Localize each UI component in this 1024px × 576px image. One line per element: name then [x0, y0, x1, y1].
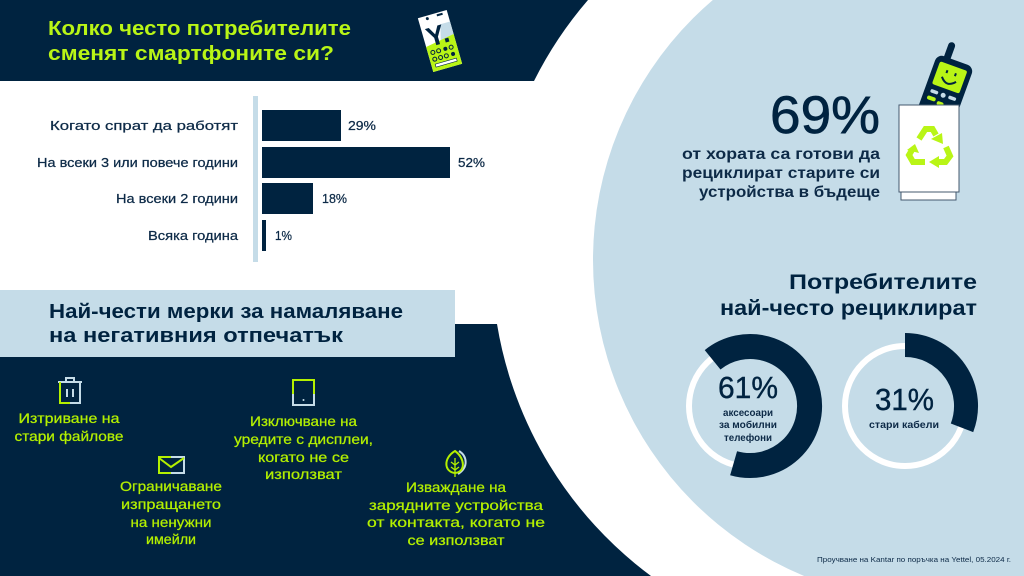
icon: envelope [159, 457, 184, 473]
bar: 52% [37, 147, 485, 178]
title: сменят смартфоните си? [48, 43, 334, 65]
text: delete old files: стари файлове [14, 428, 124, 444]
panel: measures heading band [0, 290, 455, 357]
donut chart: 31% [845, 345, 966, 466]
icon: trash can [58, 378, 82, 403]
stat: 69%: рециклират старите си [682, 165, 880, 182]
donut chart: 61%: 61% [718, 370, 778, 405]
bar: 29% [50, 110, 376, 141]
title [48, 18, 351, 65]
donut chart: 61%: аксесоари [723, 408, 773, 419]
text: switch off display devices: Изключване на [250, 413, 357, 429]
panel: bottom navy area [0, 324, 651, 576]
stat: 69%: от хората са готови да [682, 146, 880, 163]
text: delete old files: Изтриване на [18, 410, 120, 426]
bar: 1%: 1% [275, 228, 292, 243]
text: delete old files [14, 410, 124, 444]
text: unplug chargers: се използват [408, 532, 505, 548]
text: unplug chargers [367, 479, 545, 548]
panel: top header band [0, 0, 588, 81]
bar: 52%: 52% [458, 155, 485, 170]
icon: smartphone with Y logo [418, 10, 462, 72]
title: Колко често потребителите [48, 18, 351, 40]
icon: leaf [446, 451, 466, 477]
bar: 18%: На всеки 2 години [116, 191, 238, 206]
donut chart: 31%: 31% [875, 382, 934, 417]
heading: measures [49, 301, 403, 347]
bar: 18% [116, 183, 347, 214]
donut chart: 61%: телефони [724, 432, 772, 444]
text: switch off display devices: уредите с дисплеи, [234, 431, 373, 447]
text: limit emails [120, 478, 222, 547]
heading: consumers recycle: най-често рециклират [720, 297, 977, 320]
text: limit emails: имейли [146, 531, 196, 547]
heading: measures: на негативния отпечатък [49, 325, 344, 347]
icon: recycle symbol [907, 129, 950, 168]
text: unplug chargers: от контакта, когато не [367, 514, 545, 530]
text: limit emails: на ненужни [130, 514, 212, 530]
stat: 69%: 69% [770, 86, 880, 145]
text: switch off display devices: използват [265, 466, 343, 482]
text: limit emails: изпращането [121, 496, 221, 512]
heading: consumers recycle [720, 271, 977, 320]
bar: 52%: На всеки 3 или повече години [37, 155, 238, 170]
bar chart [37, 96, 485, 262]
text: switch off display devices [234, 413, 373, 482]
icon: smartphone with Y logo: Y. [423, 18, 453, 53]
donut chart: 61% [689, 345, 811, 467]
heading: consumers recycle: Потребителите [789, 271, 977, 294]
heading: measures: Най-чести мерки за намаляване [49, 301, 403, 323]
text: unplug chargers: зарядните устройства [369, 497, 543, 513]
bar: 18%: 18% [322, 191, 347, 206]
icon: old phone [913, 39, 980, 135]
stat: 69% [682, 86, 880, 201]
text: switch off display devices: когато не се [258, 449, 349, 465]
bar: 29%: 29% [348, 118, 376, 133]
panel: light blue circle [593, 0, 1024, 576]
text: limit emails: Ограничаване [120, 478, 222, 494]
donut chart: 61%: за мобилни [719, 419, 777, 431]
icon: tablet [293, 380, 314, 405]
text: unplug chargers: Изваждане на [406, 479, 506, 495]
stat: 69%: устройства в бъдеще [699, 184, 880, 201]
icon: recycling bin [899, 105, 959, 200]
donut chart: 31%: стари кабели [869, 419, 939, 431]
source note: Проучване на Kantar по поръчка на Yettel, 05.2024 г. [817, 555, 1011, 564]
bar: 29%: Когато спрат да работят [50, 118, 238, 133]
bar: 1% [148, 220, 292, 251]
bar: 1%: Всяка година [148, 228, 239, 243]
